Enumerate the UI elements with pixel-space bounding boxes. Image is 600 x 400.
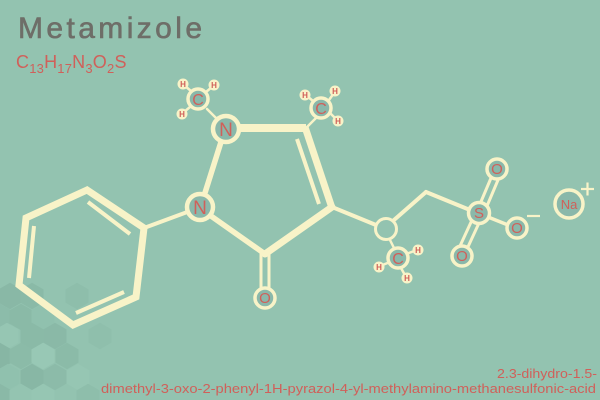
- IUPAC name: 2.3-dihydro-1.5-: [497, 366, 597, 381]
- atom labels: H: [415, 246, 421, 255]
- atom labels: O: [456, 248, 468, 265]
- hexagon background pattern: [0, 283, 112, 400]
- atom labels: O: [259, 290, 271, 307]
- atom labels: Na: [561, 197, 578, 212]
- atom labels: H: [179, 110, 185, 119]
- chemical formula: 17: [57, 61, 72, 76]
- IUPAC name: dimethyl-3-oxo-2-phenyl-1H-pyrazol-4-yl-methylamino-methanesulfonic-acid: [101, 381, 596, 396]
- atom labels: C: [192, 92, 204, 109]
- atom labels: O: [491, 161, 503, 178]
- carbonyl double bond: [260, 254, 262, 288]
- atom labels: H: [302, 91, 308, 100]
- charge symbols: [527, 182, 594, 216]
- methyl bonds: [207, 109, 220, 122]
- atom labels: H: [335, 117, 341, 126]
- molecule bonds: [19, 86, 508, 325]
- hydrogen atoms: [176, 78, 424, 284]
- pyrazole ring: [204, 142, 221, 196]
- atom labels: O: [511, 220, 523, 237]
- atom labels: N: [219, 120, 233, 141]
- chemical formula: H: [44, 52, 57, 72]
- atom labels: S: [474, 205, 484, 222]
- atom labels: H: [180, 80, 186, 89]
- atom labels: H: [332, 87, 338, 96]
- atom labels: C: [392, 251, 404, 268]
- atom labels: N: [193, 198, 207, 219]
- side chain: [332, 207, 376, 225]
- chemical formula: S: [114, 52, 127, 72]
- atom labels: H: [376, 263, 382, 272]
- sulfonate bonds: [480, 178, 491, 204]
- title: Metamizole: [18, 12, 202, 45]
- chemical formula: 3: [85, 61, 93, 76]
- chemical formula: 2: [107, 61, 114, 76]
- chemical formula: 13: [29, 61, 44, 76]
- atom labels: C: [315, 101, 327, 118]
- atoms: [187, 89, 583, 308]
- atom labels: H: [404, 274, 410, 283]
- benzene ring: [19, 190, 144, 325]
- chemical formula: N: [72, 52, 85, 72]
- IUPAC name: [101, 366, 597, 396]
- atom labels: [179, 80, 578, 307]
- chemical formula: O: [93, 52, 107, 72]
- atom labels: H: [211, 81, 217, 90]
- chemical formula: C: [16, 52, 29, 72]
